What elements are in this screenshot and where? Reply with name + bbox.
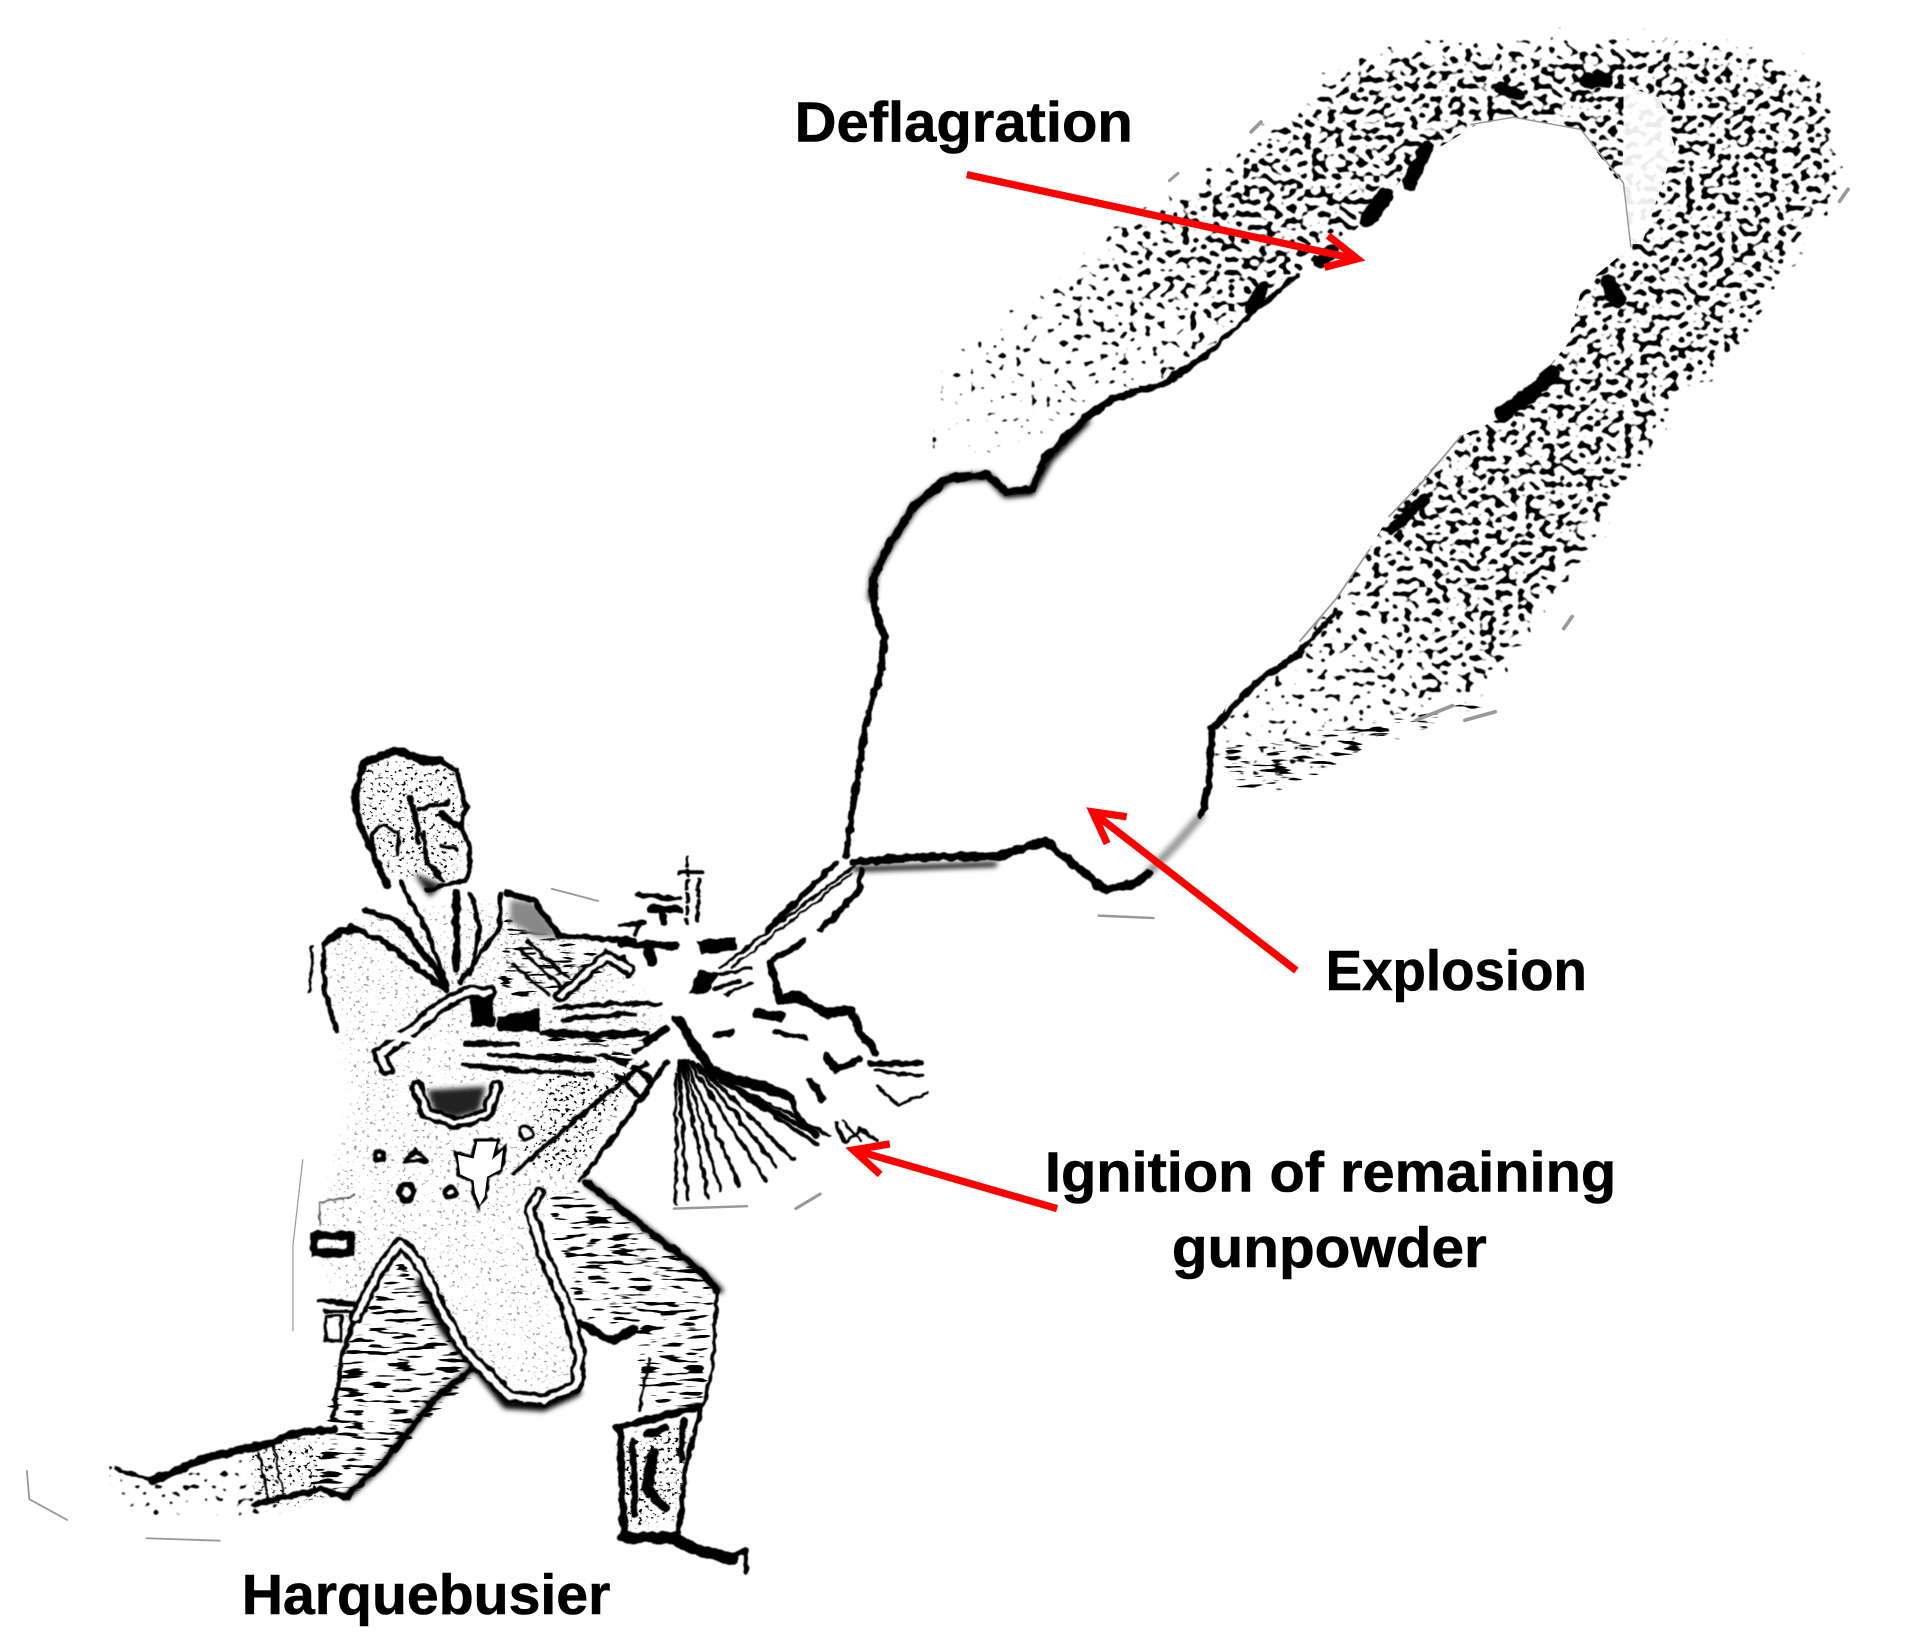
front leg xyxy=(587,1183,717,1290)
hatching on legs and chest xyxy=(305,910,714,1496)
faint surrounding strokes xyxy=(27,889,820,1541)
illustration: harquebusier figure xyxy=(27,751,928,1572)
sparks xyxy=(676,1062,830,1204)
white explosion core xyxy=(846,117,1631,890)
arm and hem white highlights xyxy=(356,956,763,1400)
back leg xyxy=(153,1430,333,1481)
white gap at flame crown xyxy=(1617,85,1675,244)
cross white centre xyxy=(458,1141,503,1205)
cross outline xyxy=(458,1141,503,1205)
boot xyxy=(616,1406,701,1428)
label: Explosion: Explosion xyxy=(1326,939,1587,1002)
arrow: explosion xyxy=(1092,812,1296,971)
black tab and block xyxy=(470,997,540,1033)
explosion outline: shade xyxy=(854,421,1201,873)
soft shading xyxy=(347,873,720,1497)
ground speckle xyxy=(95,1459,287,1526)
flame texture band xyxy=(907,40,1848,786)
flame lower streaks xyxy=(1223,696,1489,791)
barrel xyxy=(767,863,836,930)
belt items xyxy=(315,1235,350,1253)
illustration: flame blast from the muzzle xyxy=(846,40,1848,918)
tunic stipple: dense lower band xyxy=(250,1074,684,1526)
arrow: ignition of remaining gunpowder xyxy=(853,1144,1057,1209)
label: Ignition of remaining gunpowder: Ignition of remaining xyxy=(1045,1141,1616,1204)
smoke edge xyxy=(770,963,780,1000)
head stipple xyxy=(359,763,464,879)
gun stock xyxy=(514,1062,647,1173)
arrow: deflagration xyxy=(967,175,1357,267)
arm band outlines xyxy=(380,993,489,1069)
muzzle dark blobs xyxy=(690,938,736,994)
label: Ignition of remaining gunpowder xyxy=(1045,1141,1616,1279)
thin flame lines xyxy=(1099,117,1848,918)
tunic ornaments xyxy=(375,1151,385,1161)
explosion outline: hard edges xyxy=(846,81,1617,890)
tunic hem outline xyxy=(333,1317,356,1416)
head outline xyxy=(115,751,928,1572)
label: Ignition of remaining gunpowder: gunpowder xyxy=(1172,1216,1487,1279)
cross-hatched smoke top xyxy=(686,857,689,923)
label: Harquebusier: Harquebusier xyxy=(242,1563,610,1626)
tunic stipple xyxy=(320,903,665,1398)
crescent outline xyxy=(416,1087,497,1123)
flame dense strip next to the core xyxy=(1062,214,1337,421)
label: Deflagration: Deflagration xyxy=(795,91,1133,154)
collar and shoulders xyxy=(350,927,447,990)
